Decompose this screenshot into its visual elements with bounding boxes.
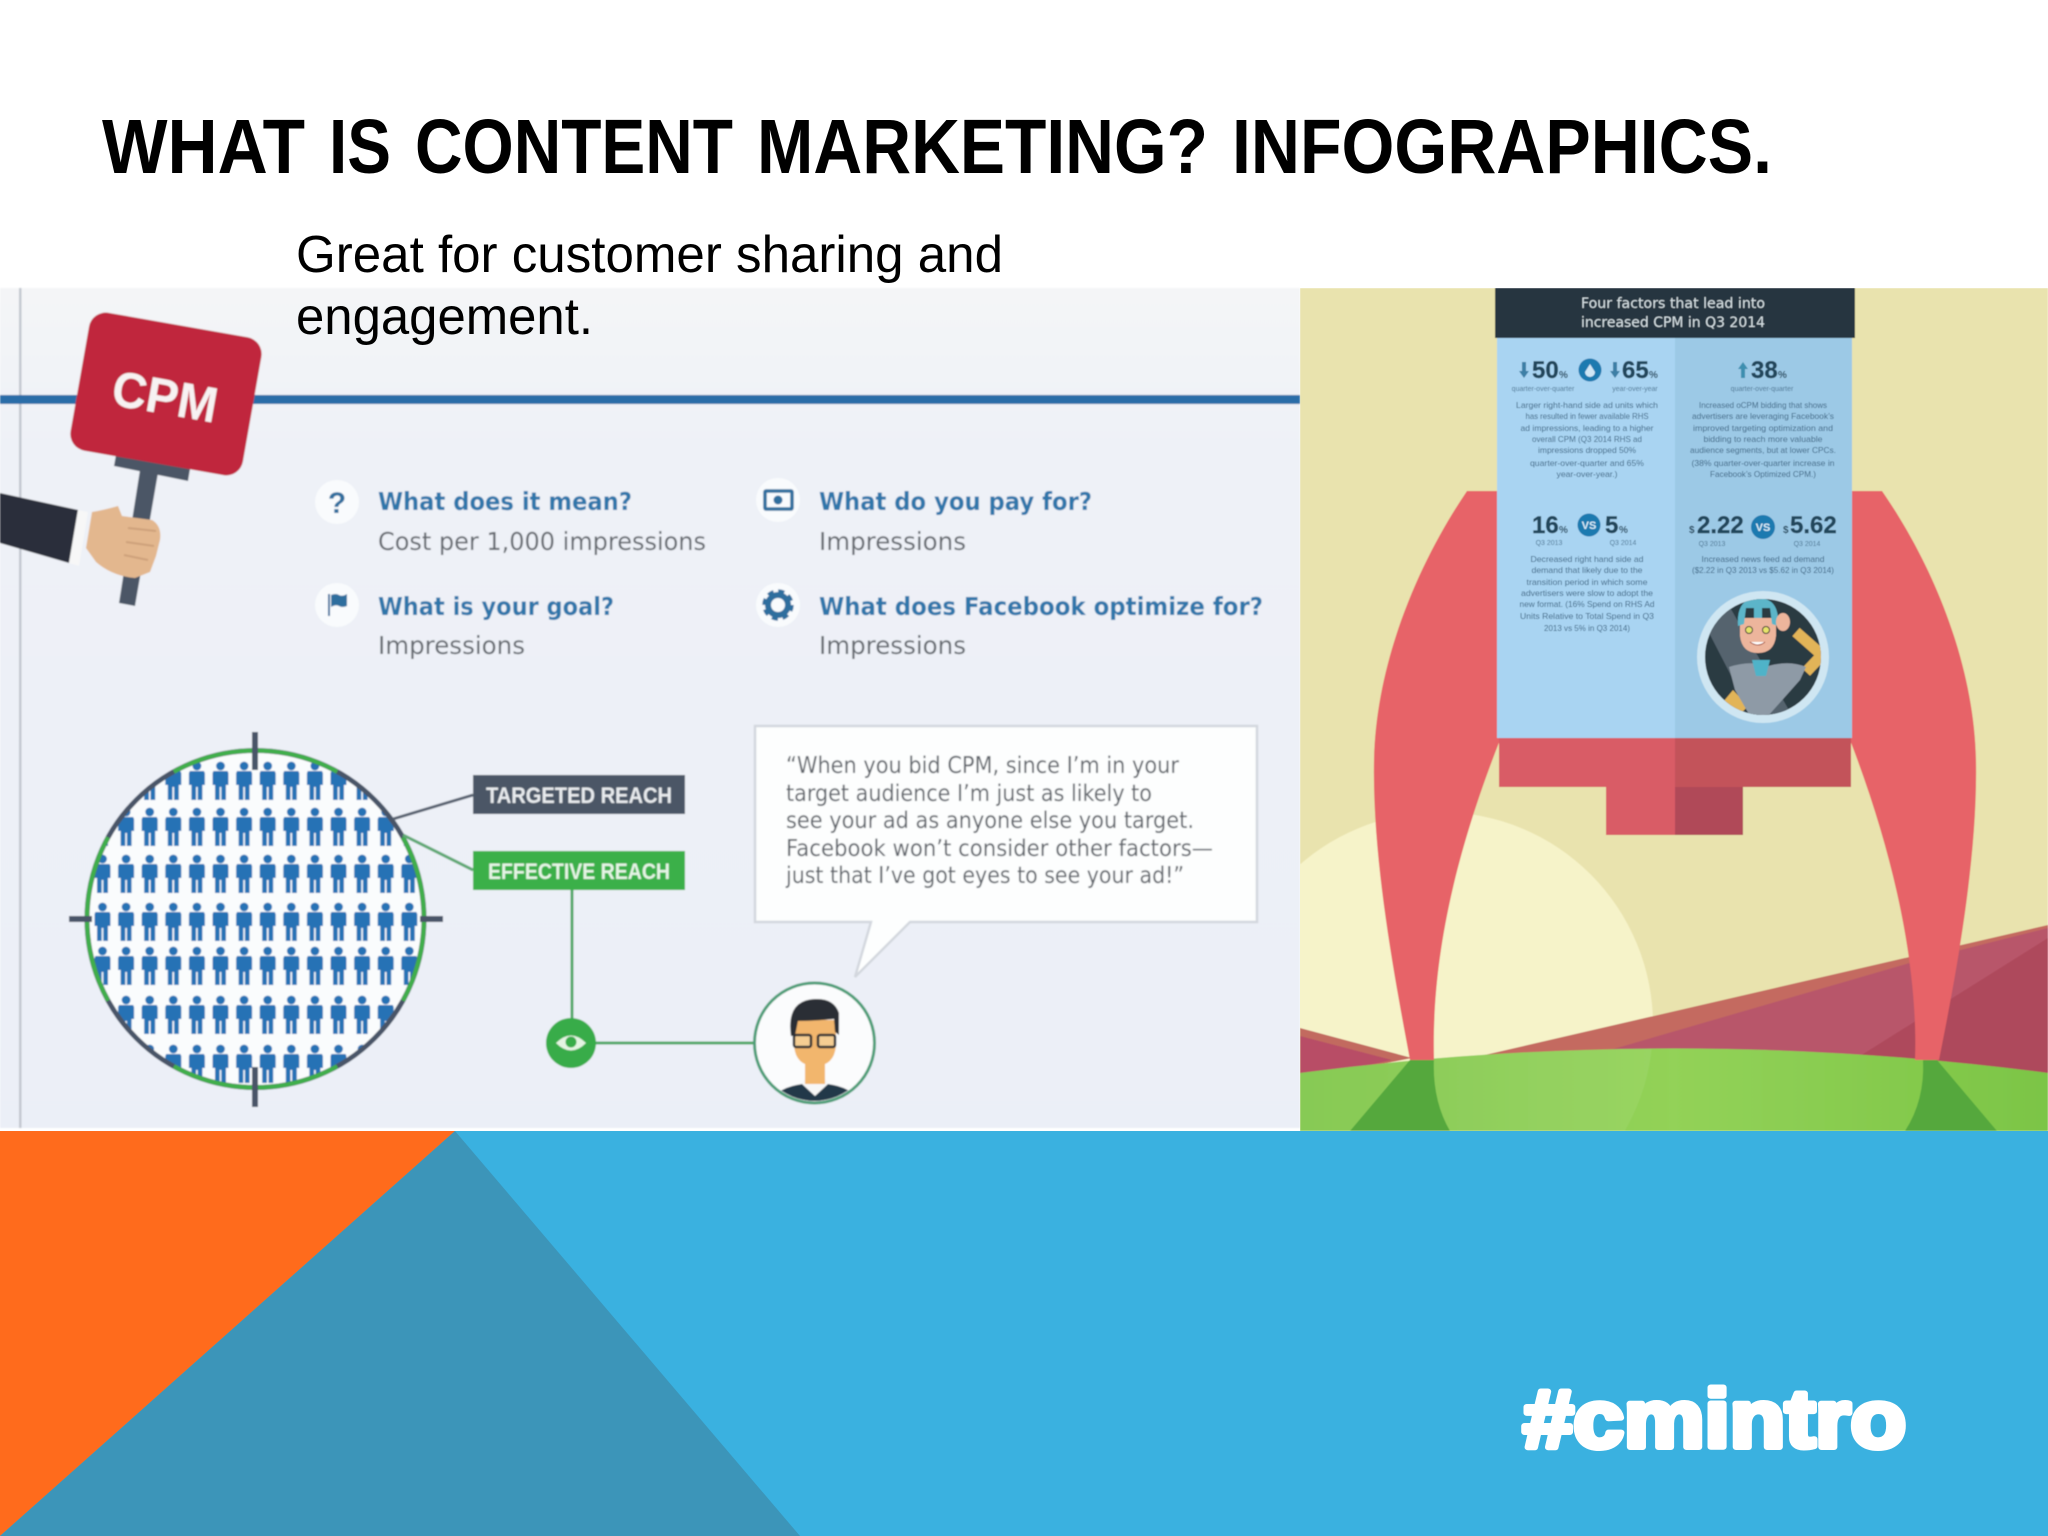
stat: 50% and 65% drop: % xyxy=(1649,370,1658,381)
rocket base block xyxy=(1499,738,1851,835)
title: INFOGRAPHICS. xyxy=(1232,104,1772,190)
callout: quote bubble: Facebook won’t consider other factors— xyxy=(786,836,1213,862)
stat: $2.22 vs $5.62 xyxy=(1689,512,1837,548)
question: what does it mean: Cost per 1,000 impressions xyxy=(378,527,706,556)
text: decreased right hand side ad demand: Decreased right hand side ad xyxy=(1530,554,1644,564)
title: MARKETING? xyxy=(757,104,1208,190)
label: targeted reach: TARGETED REACH xyxy=(486,783,672,808)
title xyxy=(102,104,1772,190)
text: decreased right hand side ad demand: new format. (16% Spend on RHS Ad xyxy=(1520,599,1655,609)
text: increased news feed ad demand: ($2.22 in Q3 2013 vs $5.62 in Q3 2014) xyxy=(1692,565,1834,575)
question: what do you pay for: What do you pay for? xyxy=(819,487,1092,516)
stat: 50% and 65% drop xyxy=(1512,357,1658,393)
text block: subtitle xyxy=(296,226,1003,346)
title: WHAT xyxy=(102,104,305,190)
question: what is your goal xyxy=(315,583,614,660)
text: right-hand side ad units: ad impressions, leading to a higher xyxy=(1520,423,1654,433)
rocket body panel xyxy=(1497,338,1852,738)
rocket right fin xyxy=(1850,491,1976,1060)
stat: 16% vs 5% xyxy=(1532,512,1637,547)
ground xyxy=(1300,1048,2048,1131)
text: oCPM bidding: improved targeting optimization and xyxy=(1693,423,1833,433)
sun xyxy=(1300,814,1653,1131)
chart: target circle of people xyxy=(69,732,443,1107)
text: decreased right hand side ad demand: Units Relative to Total Spend in Q3 xyxy=(1520,611,1654,621)
stat: 38% rise: % xyxy=(1778,370,1787,381)
bottom band: orange triangle xyxy=(0,1131,455,1536)
stat: 38% rise: 38 xyxy=(1751,357,1778,384)
stat: 16% vs 5%: % xyxy=(1619,525,1628,536)
stat: $2.22 vs $5.62: Q3 2014 xyxy=(1794,541,1821,548)
question: what does it mean xyxy=(315,480,706,556)
text: oCPM bidding: Increased oCPM bidding that shows xyxy=(1699,400,1827,410)
text block: subtitle: engagement. xyxy=(296,288,593,346)
text: decreased right hand side ad demand: transition period in which some xyxy=(1526,577,1648,587)
text: right-hand side ad units: year-over-year.) xyxy=(1556,469,1618,479)
stat: 50% and 65% drop: quarter-over-quarter xyxy=(1512,386,1575,393)
text: right-hand side ad units: overall CPM (Q3 2014 RHS ad xyxy=(1532,434,1642,444)
question: what does Facebook optimize for: What does Facebook optimize for? xyxy=(819,592,1263,621)
hashtag: #cmintro xyxy=(1523,1374,1906,1465)
icon: robot portrait xyxy=(1697,591,1829,723)
connector lines xyxy=(572,890,756,1043)
callout: quote bubble: target audience I’m just as likely to xyxy=(786,781,1152,807)
question: what do you pay for: Impressions xyxy=(819,527,966,556)
question: what does Facebook optimize for: Impressions xyxy=(819,631,966,660)
callout: quote bubble: see your ad as anyone else you target. xyxy=(786,808,1194,834)
text: decreased right hand side ad demand xyxy=(1520,554,1655,633)
title: IS xyxy=(329,104,391,190)
text: right-hand side ad units: Larger right-hand side ad units which xyxy=(1516,400,1658,410)
hills xyxy=(1300,925,2048,1080)
text block: subtitle: Great for customer sharing and xyxy=(296,226,1003,284)
label: targeted reach xyxy=(393,775,685,819)
text: oCPM bidding: audience segments, but at lower CPCs. xyxy=(1690,445,1836,455)
bottom band: blue xyxy=(0,1131,2048,1536)
stat: 38% rise: quarter-over-quarter xyxy=(1731,386,1794,393)
panel background xyxy=(0,288,1300,1128)
panel header: increased CPM in Q3 2014 xyxy=(1581,315,1765,331)
panel: rocket infographic xyxy=(1300,288,2048,1131)
title: CONTENT xyxy=(415,104,733,190)
panel: CPM infographic xyxy=(0,288,1300,1128)
question: what does Facebook optimize for xyxy=(756,583,1263,660)
icon: person avatar xyxy=(754,983,874,1110)
stat: 50% and 65% drop: 65 xyxy=(1622,357,1649,384)
text: oCPM bidding: bidding to reach more valuable xyxy=(1704,434,1823,444)
text: right-hand side ad units: quarter-over-quarter and 65% xyxy=(1530,458,1644,468)
sky xyxy=(1300,288,2048,1016)
question: what is your goal: What is your goal? xyxy=(378,592,614,621)
stat: 16% vs 5%: 5 xyxy=(1605,512,1618,539)
stat: 16% vs 5%: Q3 2013 xyxy=(1536,540,1563,547)
stat: 16% vs 5%: VS xyxy=(1582,520,1596,532)
panel header xyxy=(1495,288,1855,338)
question: what is your goal: Impressions xyxy=(378,631,525,660)
text: decreased right hand side ad demand: advertisers were slow to adopt the xyxy=(1521,588,1653,598)
text: decreased right hand side ad demand: 2013 vs 5% in Q3 2014) xyxy=(1544,623,1630,633)
text: right-hand side ad units: impressions dropped 50% xyxy=(1538,445,1636,455)
callout: quote bubble xyxy=(755,726,1257,977)
stat: $2.22 vs $5.62: VS xyxy=(1756,522,1770,534)
stat: $2.22 vs $5.62: 5.62 xyxy=(1790,512,1837,539)
text: oCPM bidding: (38% quarter-over-quarter increase in xyxy=(1692,458,1835,468)
bottom band: teal triangle xyxy=(0,1131,800,1536)
icon: eye xyxy=(546,1018,596,1068)
stat: 16% vs 5%: 16 xyxy=(1532,512,1559,539)
panel header: Four factors that lead into xyxy=(1581,296,1765,312)
icon: hand holding CPM sign xyxy=(0,310,264,606)
callout: quote bubble: “When you bid CPM, since I’m in your xyxy=(786,753,1179,779)
question: what does it mean: ? xyxy=(328,487,346,520)
label: effective reach: EFFECTIVE REACH xyxy=(488,859,670,884)
stat: $2.22 vs $5.62: $ xyxy=(1689,525,1695,536)
stat: 50% and 65% drop: 50 xyxy=(1532,357,1559,384)
stat: 50% and 65% drop: year-over-year xyxy=(1612,386,1658,393)
text: increased news feed ad demand: Increased news feed ad demand xyxy=(1702,554,1825,564)
stat: 16% vs 5%: Q3 2014 xyxy=(1610,540,1637,547)
text: oCPM bidding: advertisers are leveraging Facebook’s xyxy=(1692,411,1834,421)
stat: 16% vs 5%: % xyxy=(1559,525,1568,536)
text: increased news feed ad demand xyxy=(1692,554,1834,575)
text: oCPM bidding xyxy=(1690,400,1836,479)
callout: quote bubble: just that I’ve got eyes to see your ad!” xyxy=(785,863,1184,889)
rocket left fin xyxy=(1374,491,1500,1060)
text: oCPM bidding: Facebook’s Optimized CPM.) xyxy=(1710,469,1816,479)
text: right-hand side ad units: has resulted in fewer available RHS xyxy=(1526,411,1649,421)
text: decreased right hand side ad demand: demand that likely due to the xyxy=(1532,565,1643,575)
question: what does it mean: What does it mean? xyxy=(378,487,632,516)
stat: $2.22 vs $5.62: $ xyxy=(1783,525,1789,536)
stat: $2.22 vs $5.62: 2.22 xyxy=(1697,512,1744,539)
text: right-hand side ad units xyxy=(1516,400,1658,479)
rocket fin shadows xyxy=(1350,1058,1997,1131)
stat: 38% rise xyxy=(1730,360,1794,393)
stat: 50% and 65% drop: % xyxy=(1559,370,1568,381)
icon: hand holding CPM sign: CPM xyxy=(108,360,222,434)
label: effective reach xyxy=(403,835,685,890)
stat: $2.22 vs $5.62: Q3 2013 xyxy=(1699,541,1726,548)
question: what do you pay for xyxy=(756,478,1092,556)
